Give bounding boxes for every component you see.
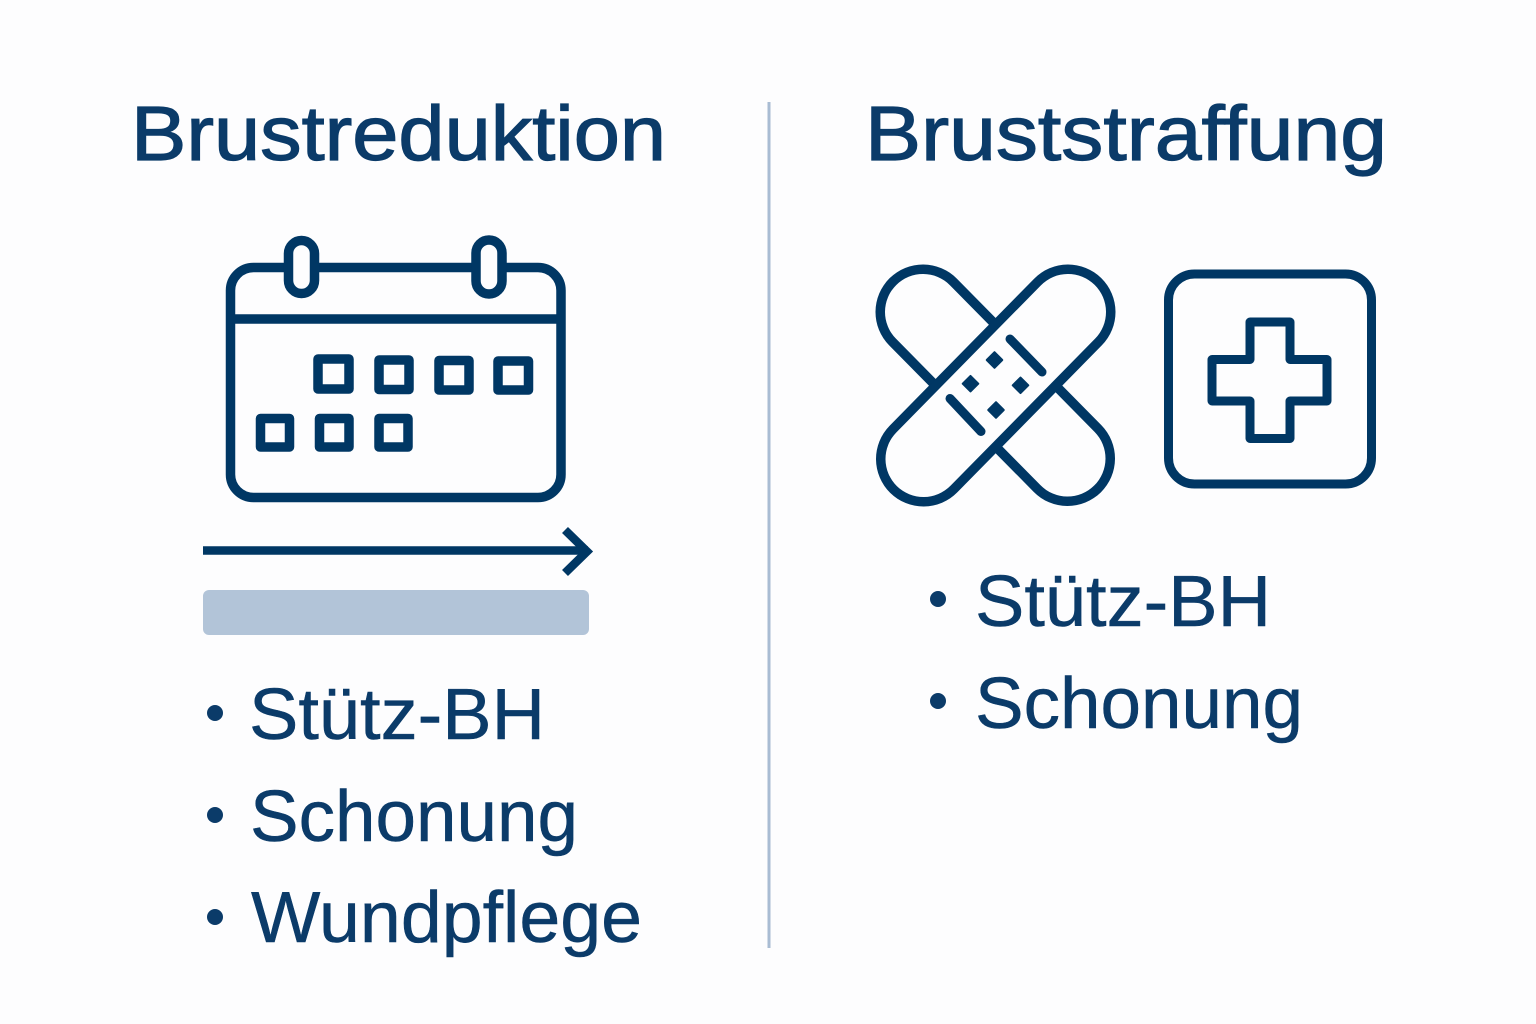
- panel: Bruststraffung: [865, 91, 1387, 744]
- list: care items: Stütz-BH: [975, 562, 1271, 642]
- list: care items: [930, 562, 1303, 744]
- list: care items: [207, 675, 642, 958]
- heading: Bruststraffung: Bruststraffung: [865, 91, 1387, 177]
- heading: Brustreduktion: Brustreduktion: [131, 91, 666, 177]
- bar: recovery duration: [203, 590, 589, 635]
- icon: calendar: [230, 240, 561, 498]
- arrow: timeline: [203, 530, 588, 573]
- list: care items: Schonung: [250, 777, 578, 857]
- icon: medical cross in square: [1168, 274, 1372, 484]
- list: care items: Stütz-BH: [249, 675, 545, 755]
- icon: crossed plasters: [923, 312, 1068, 459]
- list: care items: Schonung: [975, 664, 1303, 744]
- panel: Brustreduktion: [131, 91, 666, 958]
- list: care items: Wundpflege: [251, 878, 642, 958]
